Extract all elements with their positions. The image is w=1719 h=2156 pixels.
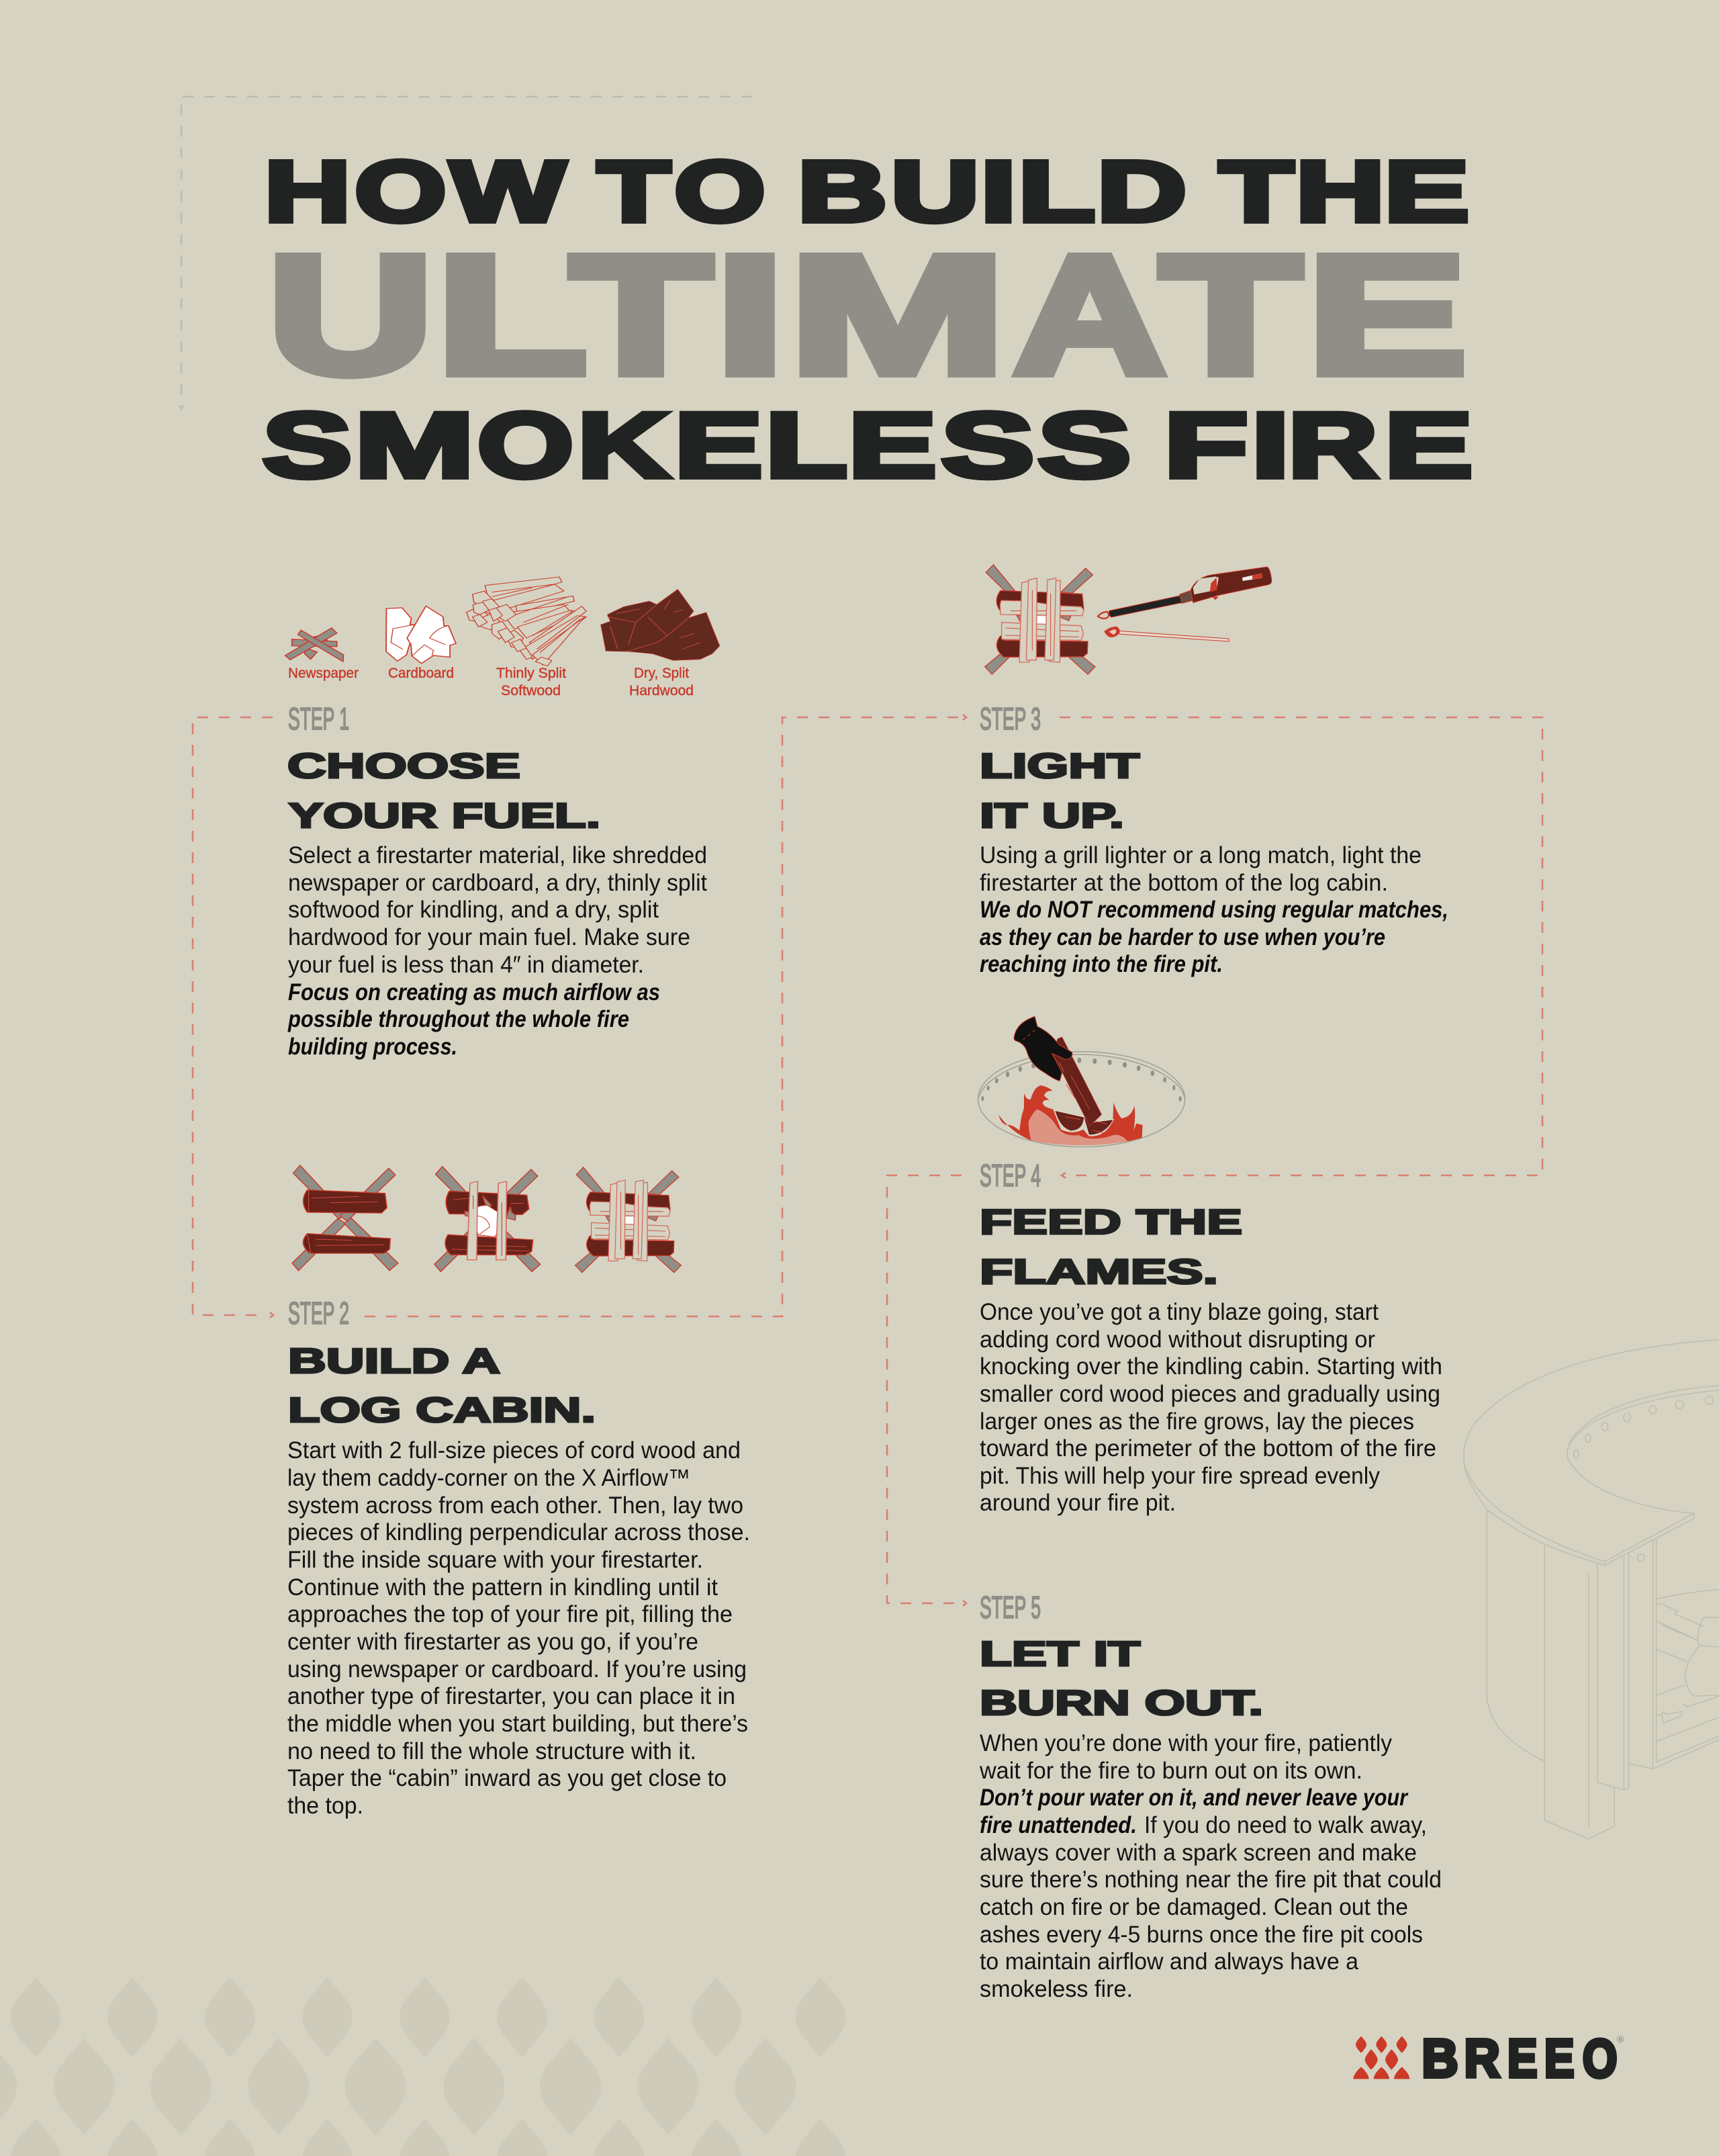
title line 2: ULTIMATE: I (716, 221, 784, 408)
step 5 body text: fire unattended. (980, 1812, 1137, 1838)
fuel labels: Dry, Split (634, 666, 689, 681)
icon: cardboard (386, 606, 456, 664)
title line 1: H (265, 144, 351, 240)
panel: step 1 (287, 701, 707, 1060)
step 3 heading: IT UP. (980, 797, 1124, 836)
illustration: fire pit line art (1464, 1340, 1719, 1839)
step 2 body text: approaches the top of your fire pit, filling the (287, 1601, 733, 1627)
step 3 body text: firestarter at the bottom of the log cabin. (980, 870, 1388, 896)
title line 3: K (577, 394, 669, 497)
step 4 heading: FEED THE (980, 1203, 1242, 1242)
title line 1: I (981, 144, 1016, 240)
panel: step 2 (287, 1296, 750, 1819)
step 3 body text: reaching into the fire pit. (980, 951, 1223, 977)
step 4 body text: toward the perimeter of the bottom of the fire (980, 1435, 1436, 1462)
step 5 body text: wait for the fire to burn out on its own. (979, 1758, 1362, 1784)
icon: grill lighter (1098, 567, 1272, 619)
step 5 body text: ashes every 4-5 burns once the fire pit cools (980, 1922, 1423, 1948)
step 4 body text: pit. This will help your fire spread evenly (980, 1463, 1380, 1489)
step 3 body text: as they can be harder to use when you’re (980, 924, 1385, 950)
step 5 body text: When you’re done with your fire, patiently (980, 1730, 1392, 1756)
illustration: log cabin build sequence (292, 1165, 681, 1273)
title line 3: S (941, 394, 1034, 497)
step 5 body text: smokeless fire. (980, 1976, 1133, 2002)
title line 3 (263, 394, 1473, 497)
step 4 body text: knocking over the kindling cabin. Starting with (980, 1353, 1442, 1380)
step 1 body text: softwood for kindling, and a dry, split (288, 897, 659, 923)
step 3 label: STEP 3 (980, 701, 1041, 736)
icon: burning wood (1053, 1037, 1113, 1135)
logo wordmark: B (1422, 2028, 1458, 2088)
step 1 body text: building process. (288, 1034, 457, 1060)
panel: step 5 (979, 1590, 1442, 2002)
icon: fire pit ring (978, 1052, 1185, 1147)
fuel labels (288, 666, 694, 699)
step 2 body text: Fill the inside square with your firestarter. (287, 1547, 703, 1573)
title line 3: S (1038, 394, 1131, 497)
icon: newspaper (285, 628, 344, 662)
title line 3: E (849, 394, 936, 497)
title line 1: E (1385, 144, 1469, 240)
step 3 body text (980, 842, 1448, 977)
logo wordmark: O (1583, 2028, 1617, 2088)
title line 1: W (451, 144, 565, 240)
step 2 body text: no need to fill the whole structure with it. (287, 1738, 696, 1764)
title line 2: ULTIMATE (268, 221, 1467, 408)
step 5 heading (980, 1635, 1263, 1723)
step 2 body text: Taper the “cabin” inward as you get close to (287, 1765, 727, 1791)
step 1 heading: CHOOSE (287, 747, 520, 786)
step 1 body text: hardwood for your main fuel. Make sure (288, 924, 690, 950)
step 5 body text: to maintain airflow and always have a (980, 1948, 1359, 1975)
step 5 body text: always cover with a spark screen and make (980, 1840, 1417, 1866)
step 2 body text: using newspaper or cardboard. If you’re using (287, 1656, 747, 1682)
step 4 body text: Once you’ve got a tiny blaze going, start (980, 1299, 1379, 1325)
title line 1: O (674, 144, 765, 240)
step 2 heading: LOG CABIN. (288, 1391, 596, 1430)
step 2 body text: Start with 2 full-size pieces of cord wood and (287, 1437, 741, 1464)
title line 2: ULTIMATE: T (1160, 221, 1301, 408)
panel: step 3 (980, 701, 1448, 977)
step 5 heading: LET IT (980, 1635, 1140, 1674)
step 4 label: STEP 4 (980, 1158, 1041, 1193)
connector: step 4 to step 5 (887, 1175, 966, 1606)
title line 1: U (891, 144, 979, 240)
step 1 heading: YOUR FUEL. (289, 797, 600, 836)
step 4 body text (980, 1299, 1442, 1516)
step 5 body text: If you do need to walk away, (1144, 1812, 1427, 1838)
logo wordmark: R (1465, 2028, 1500, 2088)
step 3 body text: We do NOT recommend using regular matches, (980, 897, 1448, 923)
step 5 body text: sure there’s nothing near the fire pit that could (980, 1867, 1442, 1893)
illustration: fuel types (285, 577, 720, 699)
title line 2: ULTIMATE: E (1307, 221, 1467, 408)
background leaf pattern (0, 1977, 845, 2156)
icon: softwood kindling (467, 577, 586, 666)
step 1 body text (287, 842, 707, 1060)
step 2 body text (287, 1437, 750, 1819)
icon: ring holes (981, 1058, 1182, 1102)
title line 1: O (355, 144, 446, 240)
step 2 body text: the middle when you start building, but there’s (287, 1711, 748, 1737)
logo wordmark: E (1507, 2028, 1537, 2088)
registered mark: ® (1617, 2034, 1624, 2045)
step 2 body text: another type of firestarter, you can place it in (287, 1683, 735, 1709)
connector: step 2 to step 3 (365, 715, 966, 1316)
step 4 heading (980, 1203, 1242, 1292)
icon: cabin (985, 565, 1095, 674)
step 4 body text: around your fire pit. (980, 1490, 1176, 1516)
logo wordmark (1422, 2028, 1617, 2088)
title line 1: D (1097, 144, 1187, 240)
step 2 heading: BUILD A (288, 1342, 500, 1381)
step 1 body text: possible throughout the whole fire (287, 1006, 629, 1032)
logo wordmark: E (1544, 2028, 1574, 2088)
step 2 body text: the top. (287, 1793, 363, 1819)
title line 3: L (765, 394, 847, 497)
icon: hardwood (601, 589, 720, 660)
step 5 body text: catch on fire or be damaged. Clean out the (980, 1894, 1408, 1920)
icon: gloved hand (1014, 1016, 1072, 1081)
step 1 body text: Focus on creating as much airflow as (288, 979, 660, 1005)
step 1 body text: Select a firestarter material, like shredded (288, 842, 707, 868)
step 5 label: STEP 5 (980, 1590, 1041, 1625)
step 5 body text: Don’t pour water on it, and never leave your (980, 1785, 1409, 1811)
illustration: lighting the fire (985, 565, 1272, 674)
step 4 body text: larger ones as the fire grows, lay the pieces (980, 1408, 1414, 1435)
title line 3: E (1385, 394, 1473, 497)
icon: cabin stage 3 (575, 1167, 681, 1273)
fuel labels: Thinly Split (496, 666, 566, 681)
connector: step 1 to step 2 (193, 717, 273, 1318)
title line 3: M (355, 394, 474, 497)
step 2 body text: center with firestarter as you go, if you’re (287, 1629, 698, 1655)
title line 1: L (1019, 144, 1095, 240)
title line 2: ULTIMATE: A (1014, 221, 1166, 408)
connector: step 3 to step 4 (1060, 717, 1542, 1178)
step 2 body text: Continue with the pattern in kindling until it (287, 1574, 718, 1601)
step 2 label: STEP 2 (288, 1296, 349, 1331)
title line 1: H (1296, 144, 1385, 240)
fuel labels: Cardboard (388, 666, 454, 681)
panel: step 4 (980, 1158, 1442, 1516)
title line 3: F (1164, 394, 1248, 497)
title line 1: T (598, 144, 670, 240)
title line 3: S (263, 394, 352, 497)
title line 3: E (674, 394, 763, 497)
title line 2: ULTIMATE: L (436, 221, 587, 408)
step 2 body text: lay them caddy-corner on the X Airflow™ (287, 1465, 690, 1491)
step 5 heading: BURN OUT. (980, 1684, 1263, 1723)
step 3 heading (980, 747, 1140, 836)
step 2 body text: pieces of kindling perpendicular across those. (287, 1519, 750, 1545)
step 3 body text: Using a grill lighter or a long match, light the (980, 842, 1422, 868)
icon: logo flames (1353, 2036, 1409, 2079)
title dashed bracket (179, 97, 763, 409)
icon: cabin stage 2 (434, 1167, 541, 1271)
icon: flames (998, 1085, 1143, 1145)
title line 1: B (798, 144, 887, 240)
step 5 body text (979, 1730, 1442, 2002)
step 4 body text: smaller cord wood pieces and gradually using (980, 1381, 1440, 1407)
icon: cabin stage 1 (292, 1165, 398, 1271)
step 4 body text: adding cord wood without disrupting or (980, 1327, 1375, 1353)
title line 2: ULTIMATE: M (790, 221, 1006, 408)
logo: Breeo (1353, 2028, 1624, 2088)
title line 1: T (1219, 144, 1293, 240)
step 1 body text: newspaper or cardboard, a dry, thinly split (288, 870, 707, 896)
title (263, 144, 1473, 497)
step 3 heading: LIGHT (980, 747, 1140, 786)
step 2 heading (288, 1342, 596, 1430)
step 1 body text: your fuel is less than 4″ in diameter. (288, 952, 644, 978)
illustration: feeding the flames (978, 1016, 1185, 1147)
title line 2: ULTIMATE: U (268, 221, 433, 408)
title line 2: ULTIMATE: T (571, 221, 712, 408)
icon: long match (1104, 627, 1229, 641)
step 2 body text: system across from each other. Then, lay two (287, 1492, 743, 1519)
title line 3: O (477, 394, 573, 497)
title line 3: I (1252, 394, 1289, 497)
step 1 heading (287, 747, 600, 836)
title line 1 (265, 144, 1469, 240)
step 4 heading: FLAMES. (980, 1253, 1218, 1292)
fuel labels: Hardwood (629, 683, 694, 699)
fuel labels: Newspaper (288, 666, 359, 681)
title line 3: R (1288, 394, 1378, 497)
fuel labels: Softwood (501, 683, 561, 699)
step 1 label: STEP 1 (288, 701, 349, 736)
